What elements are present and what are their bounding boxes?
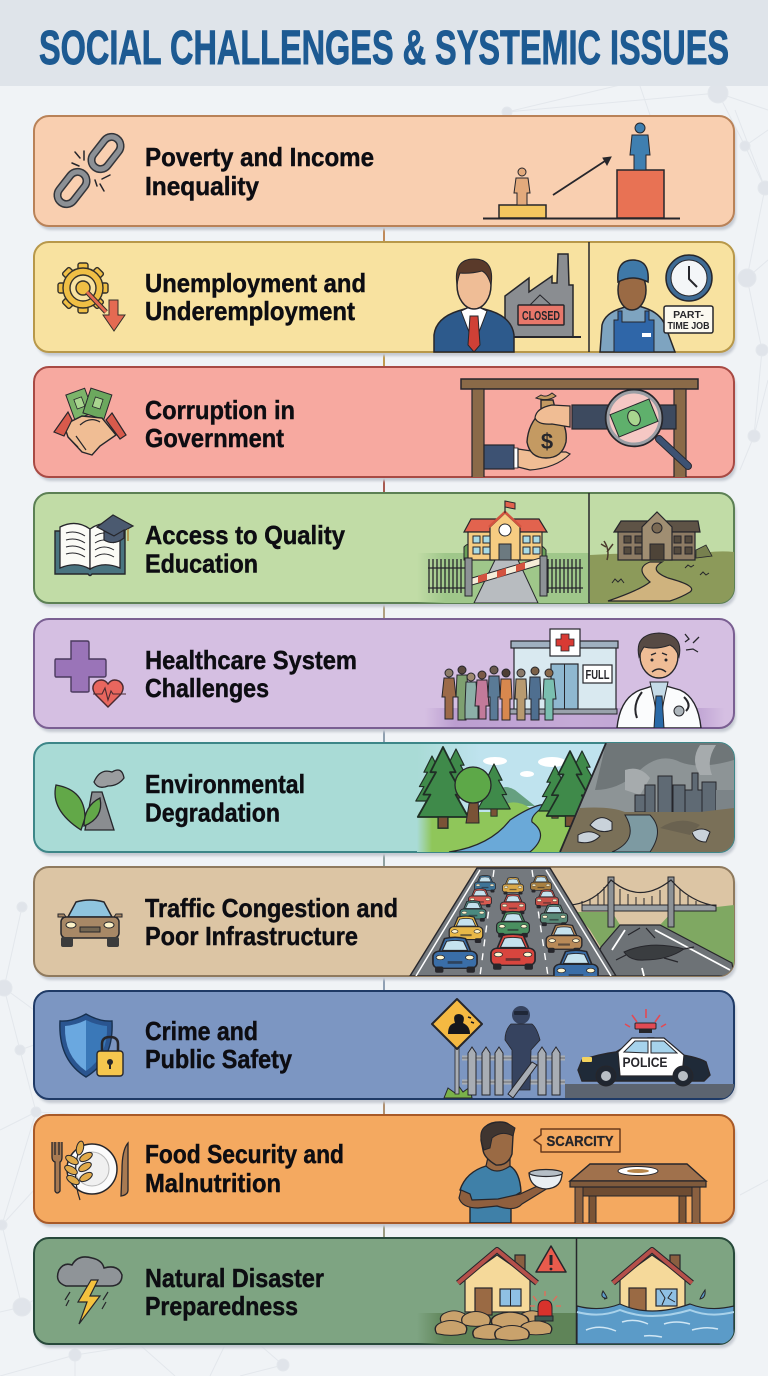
icon: leaf and factory: [55, 770, 124, 830]
illustration: overcrowded hospital: [425, 629, 725, 727]
heading: traffic: Traffic Congestion and: [145, 893, 398, 923]
illustration: table with small plate: [570, 1164, 706, 1227]
icon: warning triangle: [536, 1246, 566, 1272]
illustration: police car: POLICE: [622, 1055, 668, 1070]
illustration: police car: [565, 1009, 735, 1098]
sign: part-time job: PART-: [673, 309, 704, 321]
icon: car front: [58, 900, 122, 947]
illustration: suited man: [434, 259, 514, 352]
sign: full: [583, 665, 612, 683]
illustration: sandbagged house: [417, 1250, 576, 1344]
panel: natural disaster preparedness: [34, 1238, 736, 1348]
panel: unemployment and underemployment: [34, 242, 736, 356]
illustration: stressed doctor: [617, 633, 701, 728]
callout: scarcity: [534, 1129, 620, 1152]
heading: education: Education: [145, 548, 258, 578]
panel: healthcare system challenges: [34, 619, 736, 732]
illustration: fence and burglar: [444, 1006, 565, 1098]
illustration: under the table bribe: $: [541, 429, 553, 454]
panel: corruption in government: [34, 367, 736, 481]
heading: unemployment: Unemployment and: [145, 268, 366, 298]
illustration: under the table bribe: [461, 379, 698, 479]
panel: environmental degradation: [34, 743, 736, 856]
panel: traffic congestion and poor infrastructure: [34, 867, 736, 986]
illustration: closed factory: [503, 254, 581, 337]
divider: [588, 493, 590, 603]
connector line between panels: [383, 226, 385, 1238]
heading: disaster: Natural Disaster: [145, 1263, 324, 1293]
icon: medical cross and heart: [55, 641, 126, 707]
divider: [576, 1238, 578, 1344]
icon: book and graduation cap: [55, 515, 133, 576]
sign: part-time job: [664, 306, 713, 333]
illustration: flooded house: [577, 1250, 734, 1344]
heading: corruption: Government: [145, 423, 284, 453]
illustration: run-down school: [590, 512, 734, 603]
heading: crime: Crime and: [145, 1016, 258, 1046]
illustration: damaged bridge and road: [570, 877, 734, 976]
heading: corruption: Corruption in: [145, 395, 295, 425]
illustration: traffic jam: [410, 868, 616, 986]
heading: healthcare: Challenges: [145, 673, 269, 703]
heading: environmental: Degradation: [145, 798, 280, 828]
heading: environmental: Environmental: [145, 769, 305, 799]
header band: [0, 0, 768, 86]
heading: unemployment: Underemployment: [145, 296, 355, 326]
icon: red siren: [530, 1291, 561, 1321]
icon: broken chain: [54, 133, 124, 208]
icon: storm cloud with lightning: [58, 1257, 122, 1324]
sign: full: FULL: [586, 667, 610, 682]
panel: poverty and income inequality: [34, 116, 736, 230]
callout: scarcity: SCARCITY: [546, 1134, 614, 1150]
heading: disaster: Preparedness: [145, 1291, 298, 1321]
heading: crime: Public Safety: [145, 1044, 292, 1074]
panel: food security and malnutrition: [34, 1115, 736, 1227]
icon: wall clock: [666, 255, 712, 301]
illustration: healthy nature: [416, 744, 606, 852]
illustration: hungry person with bowl: [459, 1122, 562, 1223]
heading: food: Malnutrition: [145, 1168, 281, 1198]
illustration: queue of patients: [442, 666, 556, 720]
heading: food: Food Security and: [145, 1139, 344, 1169]
icon: plate, wheat and cutlery: [52, 1140, 128, 1200]
heading: poverty: Inequality: [145, 171, 260, 201]
heading: healthcare: Healthcare System: [145, 645, 357, 675]
heading: poverty: Poverty and Income: [145, 142, 374, 172]
panel: crime and public safety: [34, 991, 736, 1103]
icon: warning road sign: [432, 999, 482, 1049]
illustration: polluted city: [560, 743, 734, 852]
icon: gear with down arrow: [58, 263, 125, 331]
illustration: part-time worker: [600, 260, 675, 352]
illustration: unequal podiums: [483, 123, 680, 218]
panel: access to quality education: [34, 493, 736, 607]
heading: traffic: Poor Infrastructure: [145, 921, 358, 951]
illustration: gated school: [417, 501, 589, 603]
icon: shield and padlock: [60, 1014, 123, 1077]
heading: education: Access to Quality: [145, 520, 345, 550]
divider: [588, 242, 590, 352]
illustration: closed factory: CLOSED: [522, 308, 560, 323]
icon: handshake with cash: [54, 388, 126, 455]
sign: part-time job: TIME JOB: [668, 320, 710, 332]
